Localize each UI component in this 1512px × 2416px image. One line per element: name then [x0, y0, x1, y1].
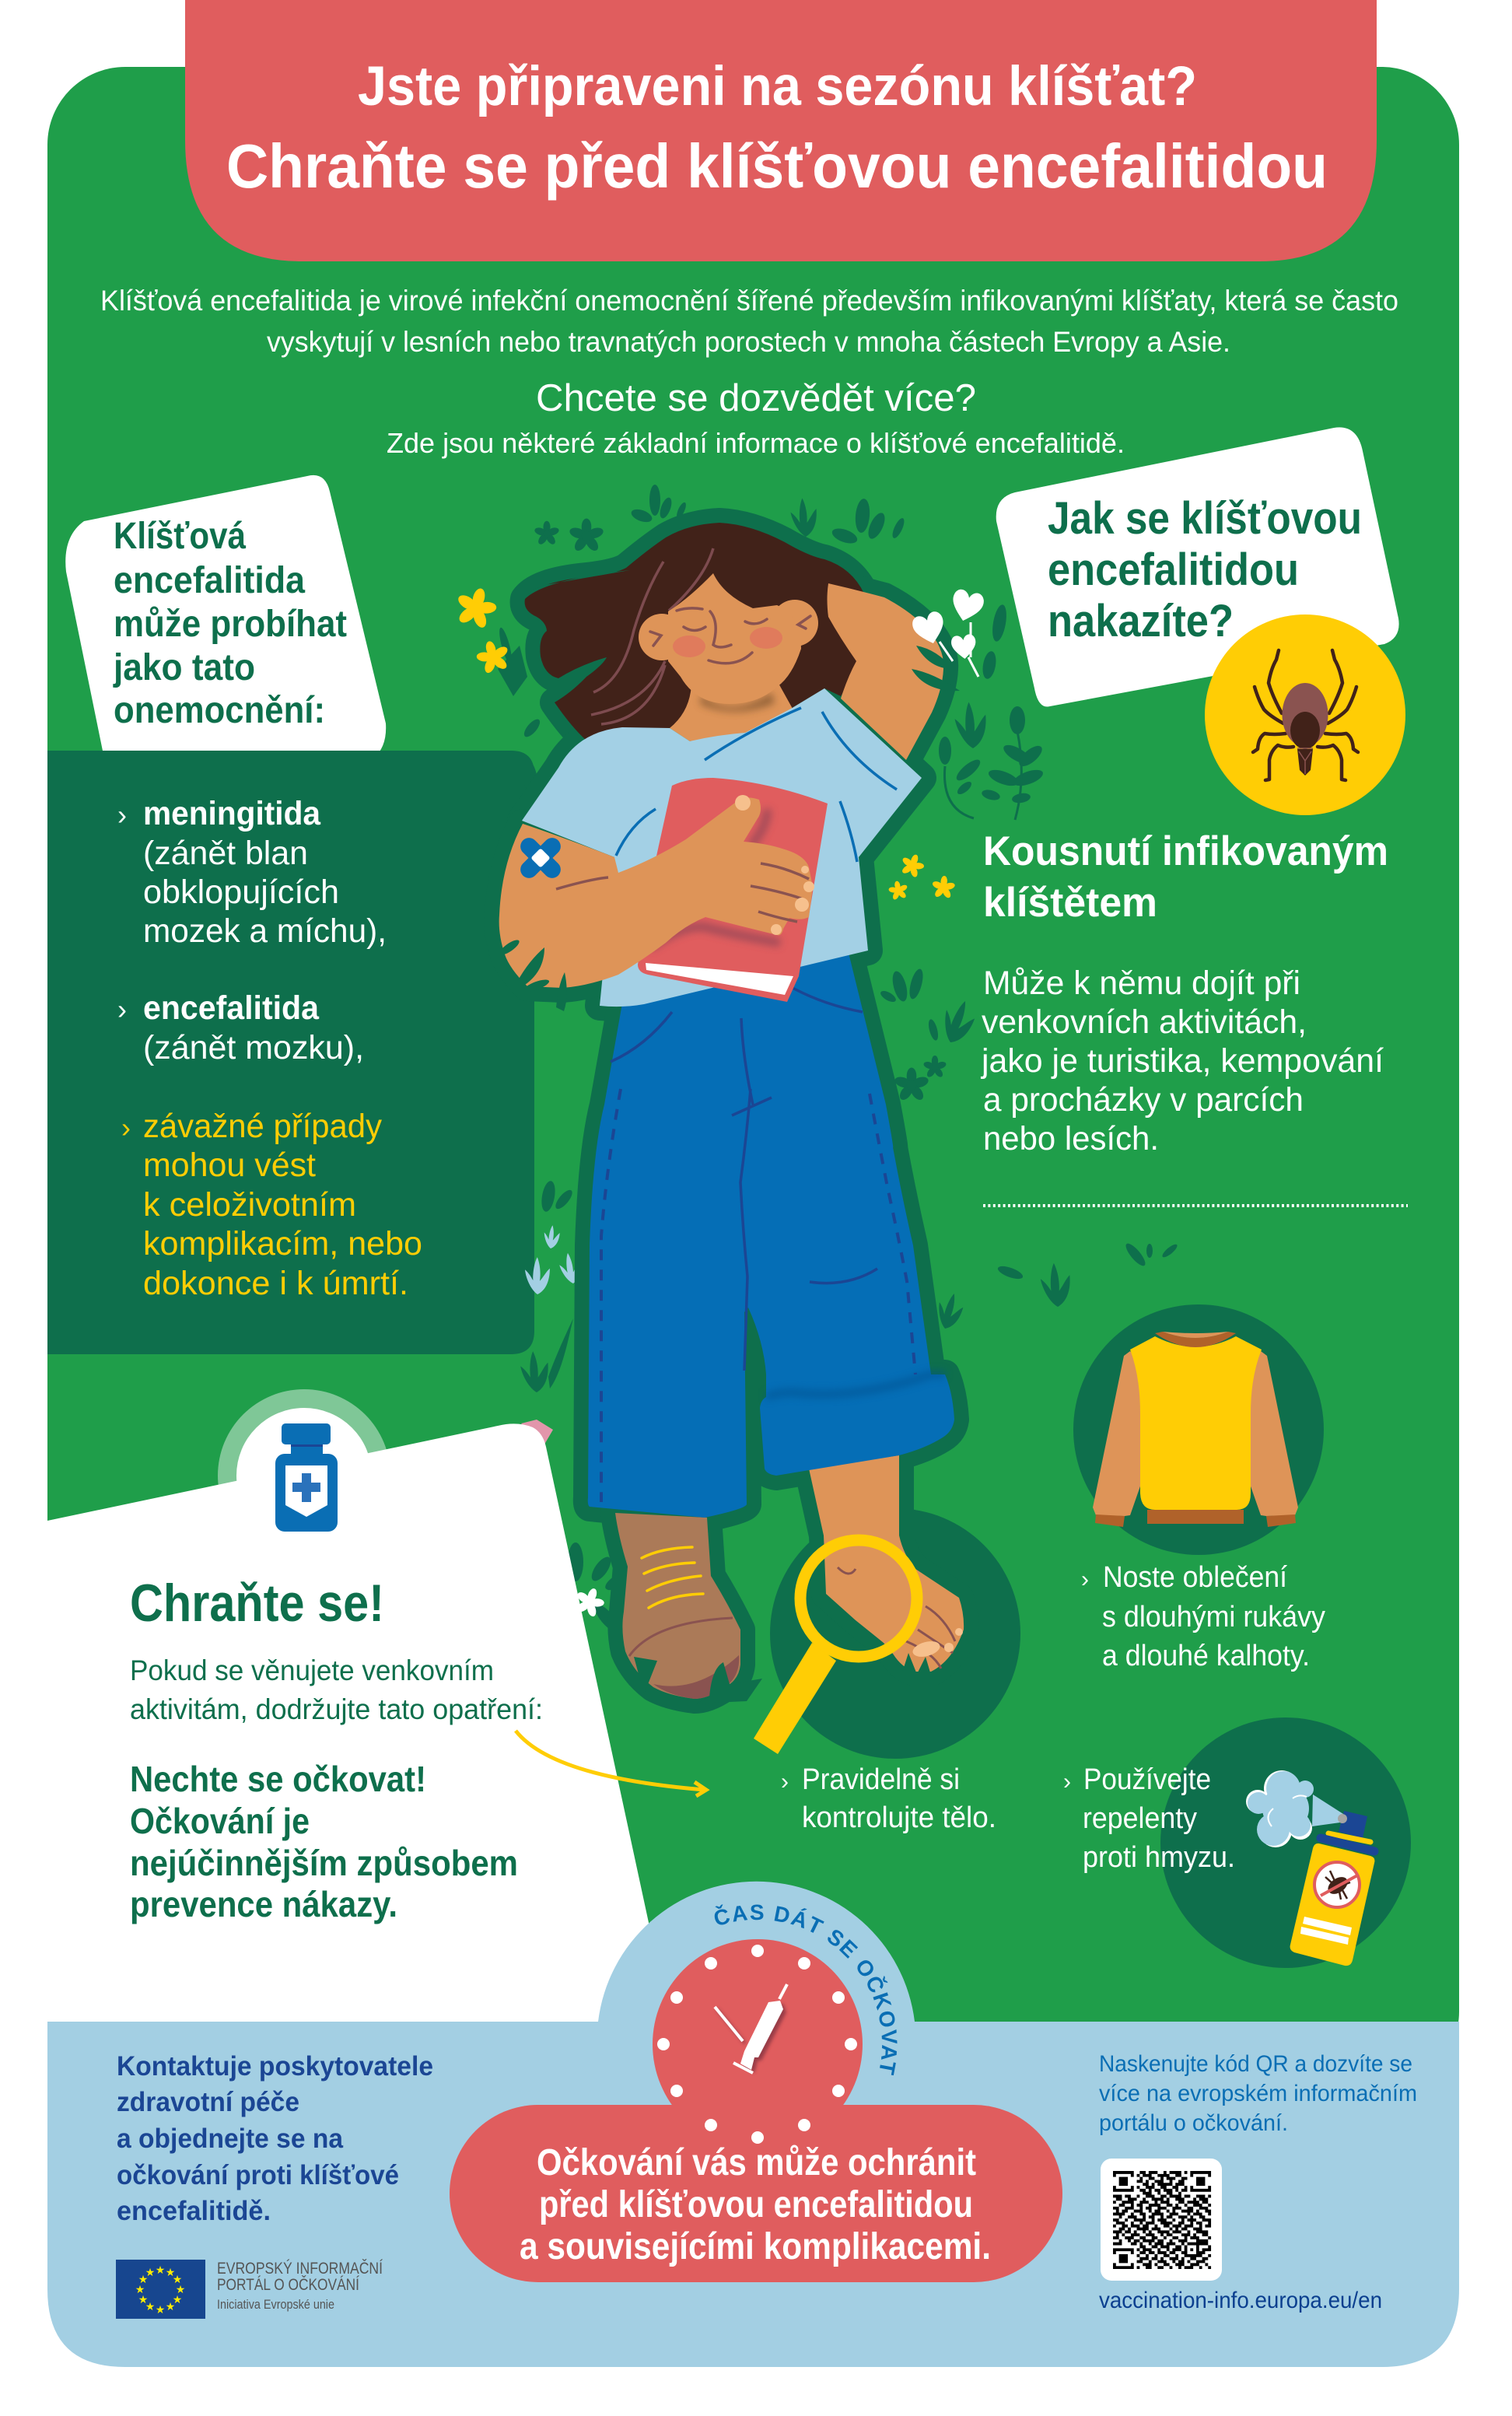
illustration: woman lying down	[498, 523, 964, 1703]
text: repellent: ›	[1063, 1769, 1071, 1794]
text: QR prompt: portálu o očkování.	[1099, 2110, 1288, 2136]
logo text: Iniciativa Evropské unie	[217, 2297, 334, 2312]
text: check body: Pravidelně si	[802, 1763, 960, 1796]
text: clothing: ›	[1081, 1567, 1089, 1592]
logo: EU flag: ★	[138, 2273, 148, 2285]
logo: EU flag: ★	[135, 2283, 145, 2295]
text: bite description: a procházky v parcích	[983, 1081, 1304, 1119]
text: clothing: Noste oblečení	[1103, 1561, 1287, 1594]
text: clothing	[1081, 1561, 1325, 1672]
text: QR prompt	[1099, 2051, 1417, 2136]
logo: EU flag: ★	[176, 2283, 185, 2295]
heading: bite: klíštětem	[983, 880, 1157, 926]
clock dots	[657, 1945, 857, 2144]
icon: repellent spray	[1160, 1717, 1411, 1968]
note: disease heading: jako tato	[113, 647, 255, 688]
logo: EU flag: ★	[173, 2273, 182, 2285]
subheading	[387, 377, 1125, 459]
panel: diseases: obklopujících	[143, 874, 339, 911]
text: contact: očkování proti klíšťové	[117, 2160, 399, 2190]
icon: bandage	[506, 823, 576, 893]
text	[130, 1654, 543, 1725]
intro text: Klíšťová encefalitida je virové infekční onemocnění šířené především infikovanými klíšťaty, která se často	[100, 285, 1398, 317]
clock badge	[450, 1904, 1062, 2282]
chin shadow	[700, 692, 775, 712]
title line 2: Chraňte se před klíšťovou encefalitidou	[226, 131, 1328, 201]
heading: bite	[983, 828, 1388, 926]
panel: diseases: ›	[121, 1112, 131, 1143]
right foot	[809, 1455, 964, 1672]
white hearts	[911, 587, 985, 677]
text: QR prompt: více na evropském informačním	[1099, 2081, 1417, 2106]
note: disease heading: encefalitida	[114, 560, 305, 601]
curved text: ČAS DÁT SE OČKOVAT	[714, 1904, 898, 2075]
logo: EU flag: ★	[156, 2264, 165, 2276]
panel: diseases: závažné případy	[143, 1108, 382, 1145]
QR code	[1101, 2159, 1222, 2281]
panel: diseases: encefalitida	[143, 989, 320, 1027]
neck	[670, 681, 793, 741]
logo: EU flag: ★	[145, 2300, 155, 2313]
left foot	[615, 1513, 762, 1703]
panel: diseases: k celoživotním	[143, 1186, 356, 1224]
icon: tick on yellow circle	[1205, 615, 1405, 815]
text: QR prompt: Naskenujte kód QR a dozvíte se	[1099, 2051, 1412, 2077]
jeans	[588, 953, 954, 1518]
text: Pokud se věnujete venkovním	[130, 1654, 494, 1686]
text: bite description: nebo lesích.	[983, 1120, 1159, 1157]
bold text	[130, 1759, 518, 1924]
text: repellent: Používejte	[1083, 1763, 1211, 1796]
icon: magnifying glass	[754, 1540, 917, 1754]
heading: Chraňte se!	[130, 1574, 384, 1633]
text: contact: zdravotní péče	[117, 2087, 299, 2117]
panel: diseases	[47, 751, 534, 1354]
text: bite description: jako je turistika, kempování	[980, 1042, 1384, 1080]
subheading: Chcete se dozvědět více?	[536, 377, 976, 419]
pill text: před klíšťovou encefalitidou	[539, 2184, 973, 2225]
panel: footer	[47, 1882, 1459, 2367]
t-shirt	[522, 688, 922, 1007]
panel: diseases: (zánět mozku),	[143, 1029, 364, 1066]
logo: EU flag	[116, 2260, 205, 2319]
intro text: vyskytují v lesních nebo travnatých porostech v mnoha částech Evropy a Asie.	[267, 326, 1230, 358]
intro text	[100, 285, 1398, 358]
panel: diseases: komplikacím, nebo	[143, 1225, 422, 1262]
logo: EU flag: ★	[138, 2293, 148, 2306]
leaves over arm	[498, 646, 960, 1011]
arm and hand	[499, 795, 814, 988]
panel: diseases: dokonce i k úmrtí.	[143, 1265, 408, 1302]
logo text: EVROPSKÝ INFORMAČNÍ	[217, 2260, 383, 2278]
note: disease heading	[65, 475, 386, 758]
face	[639, 573, 818, 704]
bold text: nejúčinnějším způsobem	[130, 1843, 518, 1883]
text: clothing: s dlouhými rukávy	[1102, 1601, 1325, 1633]
syringe hand	[733, 1984, 787, 2073]
panel: diseases: ›	[117, 993, 127, 1025]
text: bite description: Může k němu dojít při	[983, 965, 1300, 1002]
pill text: Očkování vás může ochránit	[537, 2142, 976, 2183]
vaccine ring	[218, 1389, 390, 1562]
message pill	[450, 2105, 1062, 2282]
note: how infected: nakazíte?	[1048, 596, 1234, 646]
logo: EU flag: ★	[173, 2293, 182, 2306]
text: contact: a objednejte se na	[117, 2124, 344, 2154]
note: disease heading: onemocnění:	[114, 690, 325, 731]
white flower	[570, 1584, 609, 1621]
text: aktivitám, dodržujte tato opatření:	[130, 1693, 543, 1725]
text: contact	[117, 2051, 433, 2226]
figure outline	[499, 523, 964, 1699]
book	[638, 778, 828, 1002]
note: how infected: Jak se klíšťovou	[1048, 493, 1362, 544]
title line 1: Jste připraveni na sezónu klíšťat?	[358, 56, 1197, 117]
note: disease heading: Klíšťová	[114, 516, 246, 557]
icon: sweater	[1073, 1304, 1324, 1555]
logo: EU flag: ★	[166, 2266, 175, 2278]
clock face	[653, 1939, 863, 2149]
green main panel	[47, 67, 1459, 2089]
panel: diseases: meningitida	[143, 795, 321, 832]
pill text	[520, 2142, 991, 2267]
text: contact: Kontaktuje poskytovatele	[117, 2051, 433, 2082]
subheading: Zde jsou některé základní informace o klíšťové encefalitidě.	[387, 427, 1125, 459]
panel: protect yourself	[47, 1389, 674, 2038]
hair	[525, 523, 875, 741]
note: disease heading: může probíhat	[114, 604, 347, 645]
pale blue flowers	[523, 1224, 582, 1295]
text: repellent: proti hmyzu.	[1083, 1841, 1235, 1874]
panel: diseases: ›	[117, 799, 127, 831]
bold text: Očkování je	[130, 1801, 310, 1841]
arrow	[516, 1731, 706, 1796]
pink petal	[521, 1420, 553, 1448]
logo: EU flag: ★	[156, 2303, 165, 2316]
logo text: PORTÁL O OČKOVÁNÍ	[217, 2276, 359, 2294]
circle behind foot	[770, 1508, 1020, 1759]
text: repellent	[1063, 1763, 1235, 1874]
logo text	[217, 2260, 383, 2312]
spray cloud	[1246, 1770, 1343, 1847]
logo: EU flag: ★	[145, 2266, 155, 2278]
bold text: Nechte se očkovat!	[130, 1759, 426, 1799]
panel: diseases: mohou vést	[143, 1147, 316, 1184]
decorative foliage	[497, 485, 1179, 1635]
heading: bite: Kousnutí infikovaným	[983, 828, 1388, 874]
text: bite description	[980, 965, 1384, 1157]
text: check body	[781, 1763, 996, 1834]
panel: diseases: mozek a míchu),	[143, 912, 387, 950]
text: clothing: a dlouhé kalhoty.	[1102, 1640, 1310, 1672]
title banner	[185, 0, 1377, 261]
text: contact: encefalitidě.	[117, 2196, 271, 2226]
logo: EU flag: ★	[166, 2300, 175, 2313]
clock hand	[715, 2007, 745, 2043]
text: repellent: repelenty	[1083, 1802, 1197, 1835]
text: check body: kontrolujte tělo.	[802, 1801, 996, 1834]
panel: diseases: (zánět blan	[143, 835, 308, 872]
bold text: prevence nákazy.	[130, 1884, 397, 1924]
note: how infected	[996, 427, 1399, 707]
text: check body: ›	[781, 1769, 789, 1794]
icon: vaccine vial	[275, 1423, 338, 1532]
yellow flowers	[450, 583, 957, 902]
back arm	[828, 583, 943, 760]
pill text: a souvisejícími komplikacemi.	[520, 2226, 991, 2267]
text: bite description: venkovních aktivitách,	[982, 1003, 1307, 1041]
note: how infected: encefalitidou	[1048, 544, 1299, 595]
URL: vaccination-info.europa.eu/en	[1099, 2288, 1382, 2313]
